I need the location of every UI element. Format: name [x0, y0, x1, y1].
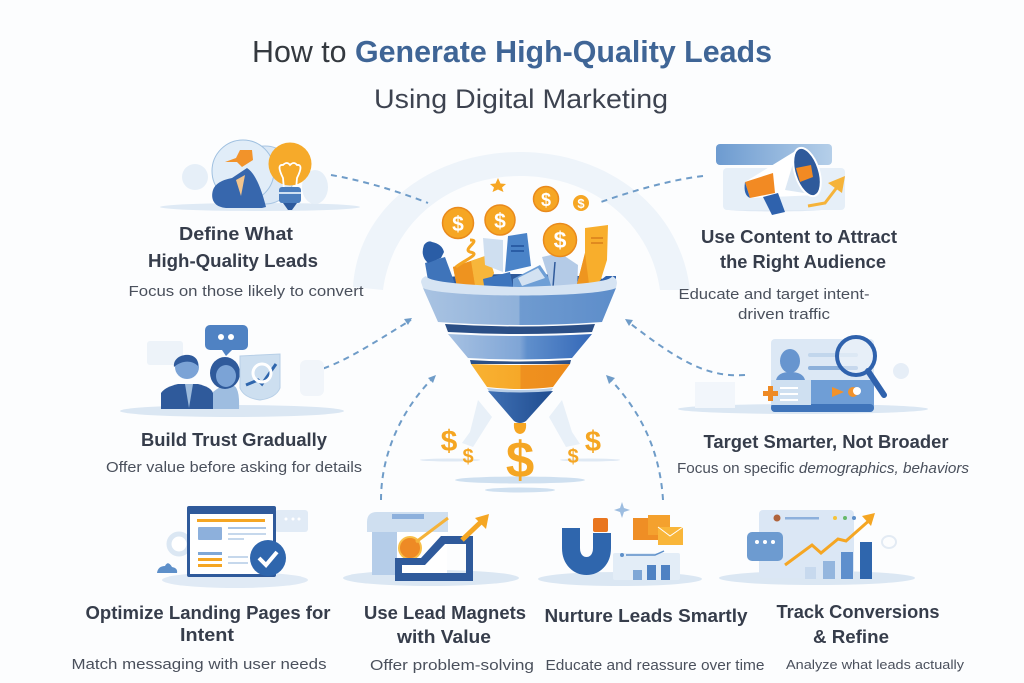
heading: Nurture Leads Smartly [544, 606, 748, 626]
heading: Track Conversions [776, 602, 940, 622]
title: Using Digital Marketing [374, 84, 668, 114]
icon: people and shield [120, 325, 344, 417]
pale drips [462, 400, 492, 447]
dollar signs: $ [506, 431, 534, 488]
heading: Build Trust Gradually [141, 430, 327, 450]
description: Offer problem-solving [370, 657, 534, 674]
title [252, 34, 772, 114]
description: Analyze what leads actually [786, 657, 965, 672]
funnel ground shadows [420, 458, 620, 492]
panel: target smarter [677, 337, 970, 477]
description: driven traffic [738, 306, 831, 323]
icon: megaphone [716, 144, 845, 215]
panel: content [678, 144, 897, 323]
funnel drip [514, 423, 526, 434]
arrow: content to funnel [598, 176, 703, 203]
arrow: nurture to funnel [608, 377, 663, 500]
heading: with Value [396, 627, 491, 647]
funnel light strip [487, 388, 553, 393]
icon: profile and magnifier [678, 337, 928, 414]
funnel background arc [353, 152, 690, 290]
arrow: trust to funnel [302, 320, 411, 373]
coins: $ [577, 196, 585, 211]
icon: person and lightbulb [160, 140, 360, 211]
heading: & Refine [813, 627, 889, 647]
funnel cone [488, 391, 553, 423]
coins [442, 178, 589, 256]
dollar signs: $ [567, 446, 579, 468]
heading: the Right Audience [720, 252, 886, 272]
heading: Define What [179, 224, 293, 244]
icon: magnet and envelopes [538, 502, 702, 586]
funnel rim [421, 276, 617, 297]
dollar signs: $ [441, 425, 458, 458]
dollar signs [441, 425, 601, 488]
funnel interior [425, 274, 613, 292]
funnel middle section [448, 334, 592, 360]
central funnel illustration [420, 178, 620, 492]
description: Match messaging with user needs [72, 656, 326, 673]
heading: Optimize Landing Pages for [86, 603, 330, 623]
funnel dark band [445, 324, 595, 334]
panel: track conversions [719, 510, 965, 672]
heading: Use Lead Magnets [364, 603, 526, 623]
icon: book and chart [343, 512, 519, 586]
funnel orange section [471, 364, 570, 389]
heading: Target Smarter, Not Broader [704, 432, 948, 452]
panel: lead magnets [343, 512, 534, 674]
heading: Use Content to Attract [701, 227, 897, 247]
panel: nurture leads [538, 502, 764, 674]
title: How to Generate High-Quality Leads [252, 34, 772, 69]
spring [456, 240, 474, 267]
arrow: define to funnel [331, 175, 428, 203]
funnel thin band [470, 360, 571, 364]
panel: build trust [106, 325, 362, 476]
description: Educate and target intent- [678, 286, 870, 303]
funnel contents [423, 225, 616, 292]
description: Focus on specific demographics, behaviors [677, 460, 970, 477]
description: Educate and reassure over time [546, 657, 764, 674]
dollar signs: $ [462, 446, 474, 468]
heading: High-Quality Leads [148, 251, 318, 271]
coins: $ [554, 227, 567, 253]
arrow: target to funnel [627, 321, 745, 375]
panel: landing pages [72, 506, 330, 673]
description: Focus on those likely to convert [128, 283, 364, 300]
icon: growth chart [719, 510, 915, 585]
coins: $ [541, 190, 551, 210]
heading: Intent [180, 625, 234, 645]
description: Offer value before asking for details [106, 459, 362, 476]
dollar signs: $ [585, 426, 601, 458]
icon: webpage with check [157, 506, 308, 588]
coins: $ [494, 210, 506, 233]
panel: define leads [128, 140, 364, 300]
coins: $ [452, 213, 464, 236]
arrow: magnets to funnel [381, 376, 435, 500]
funnel upper section [423, 288, 616, 325]
